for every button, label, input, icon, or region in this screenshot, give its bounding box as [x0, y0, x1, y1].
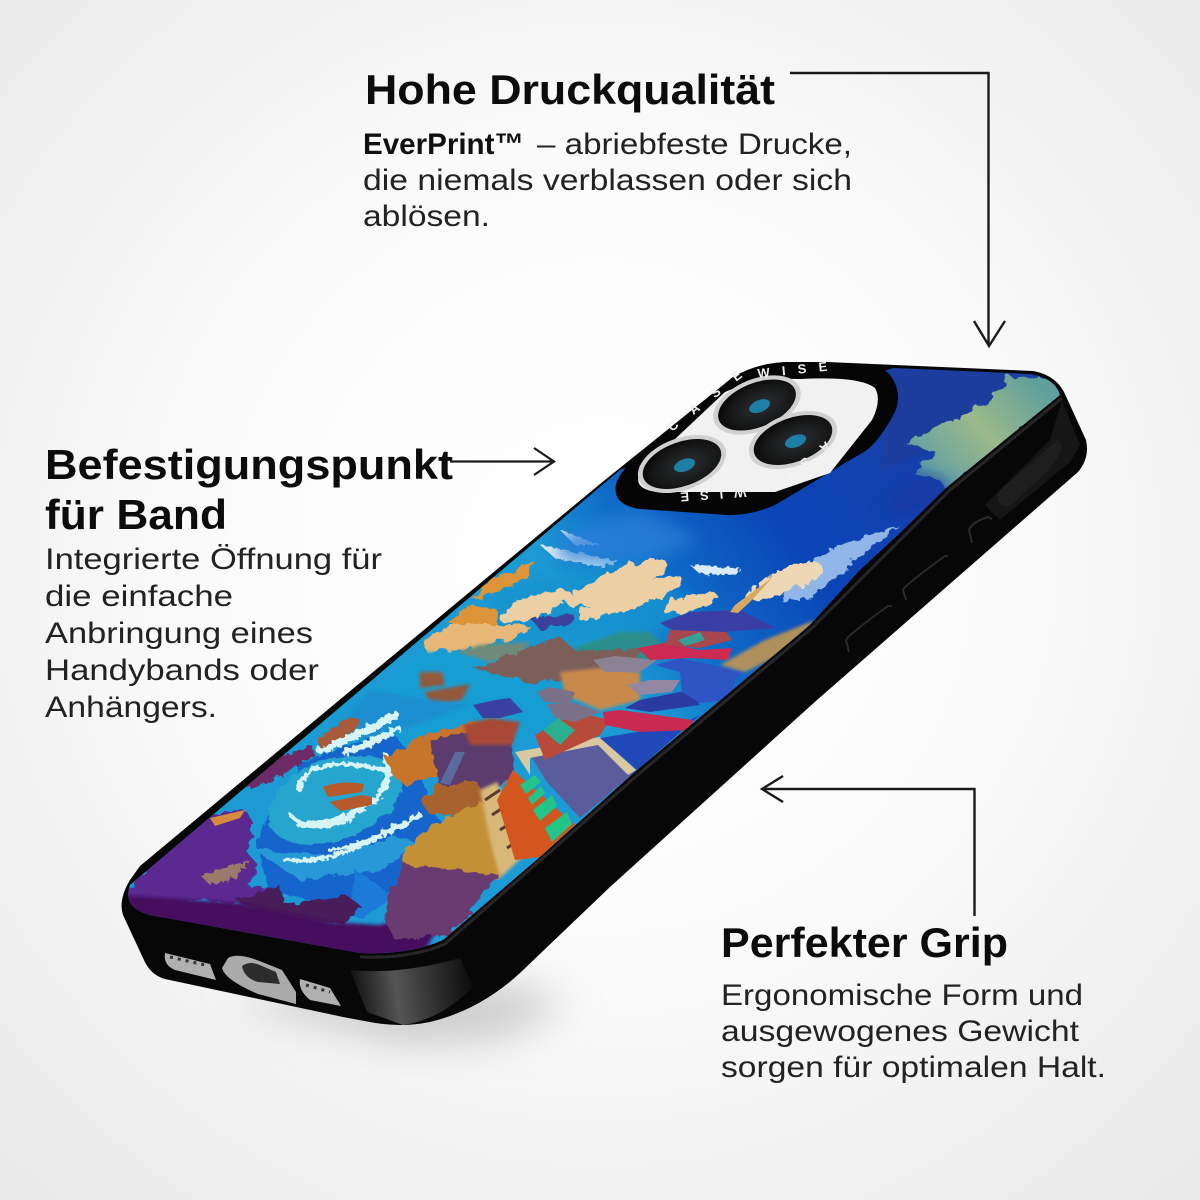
purple cliff [385, 865, 500, 940]
purple foreground rocks [128, 809, 270, 906]
description: Ergonomische Form und [721, 979, 1083, 1012]
green windows [520, 775, 572, 842]
camera island [616, 359, 898, 515]
bright blue water inlet [350, 870, 390, 920]
temple wall orange [497, 770, 575, 860]
description: – abriebfeste Drucke, [537, 128, 852, 161]
description [721, 979, 1106, 1084]
water turquoise core [268, 755, 403, 846]
green windows mid [543, 718, 575, 745]
walkway balustrade [480, 782, 530, 878]
sea rocks [420, 672, 470, 705]
ring lettering: W I S E [757, 359, 828, 381]
golden rocks [387, 722, 478, 785]
side switch [997, 440, 1061, 506]
description [363, 128, 852, 233]
description: Anbringung eines [45, 617, 313, 650]
ring lettering [665, 359, 853, 505]
rocks behind stairs [430, 732, 514, 794]
small left pagoda roof [473, 698, 523, 718]
description: die niemals verblassen oder sich [363, 164, 852, 197]
arrow: strap attachment [450, 448, 554, 475]
description: Handybands oder [45, 654, 319, 687]
description: Integrierte Öffnung für [45, 543, 382, 576]
roof cream edge [515, 737, 636, 775]
upper pagoda body [665, 630, 732, 648]
big tiled roof [530, 740, 635, 818]
camera ring [616, 362, 898, 515]
arrow: print quality [790, 73, 1005, 346]
orange rock top [210, 810, 245, 826]
blue roof right [655, 658, 745, 703]
vortex rocks [323, 783, 372, 811]
cream clouds [500, 558, 718, 624]
arrow: grip [762, 776, 974, 916]
teal windows [678, 632, 705, 646]
charging port [222, 956, 296, 1004]
lens left [630, 424, 734, 504]
golden temple lower floor [535, 712, 610, 760]
callout: print quality [363, 66, 852, 233]
upper pagoda roof [660, 610, 777, 632]
description: ablösen. [363, 200, 490, 233]
glossy bottom corner [350, 958, 473, 1025]
rail posts [485, 790, 522, 848]
gold tint on rock [200, 860, 250, 885]
case silhouette [122, 362, 1087, 1025]
green cloud [905, 376, 1062, 492]
case artwork [128, 368, 1060, 954]
description [45, 543, 382, 724]
teal mountain [573, 632, 668, 662]
right hillside [720, 620, 815, 672]
mid dark windows [625, 690, 700, 712]
stairs [440, 752, 465, 785]
sea [313, 650, 580, 744]
ring lettering: C A S E [665, 367, 745, 434]
lower rocks [235, 885, 360, 925]
balcony upper [637, 643, 732, 660]
water vortex [256, 736, 442, 900]
heading: für Band [45, 491, 227, 538]
lens right [741, 400, 845, 480]
phone case [122, 362, 1087, 1025]
rim highlight [360, 398, 1062, 957]
dark sky streaks [880, 368, 1012, 470]
heading: Hohe Druckqualität [365, 66, 775, 113]
heading [45, 441, 453, 538]
orange clouds [447, 560, 533, 628]
spire [730, 577, 773, 613]
dark pocket below cloud [902, 465, 954, 520]
heading: Perfekter Grip [721, 919, 1008, 966]
ring lettering: C A S E [777, 423, 853, 487]
sky [128, 368, 1060, 954]
description: Anhängers. [45, 691, 217, 724]
side buttons [846, 517, 992, 652]
white sky wisps [540, 530, 740, 575]
upper-left foam sea [338, 692, 465, 739]
phone shadow [230, 985, 570, 1045]
grey roof upper [593, 656, 657, 672]
red balcony [603, 710, 693, 732]
purple cloud base [530, 613, 573, 630]
grey roof mid [627, 680, 680, 695]
mid gold floors [560, 668, 640, 710]
case side shading [985, 400, 1080, 520]
cream cloud right [745, 560, 824, 602]
turquoise low sky [582, 559, 698, 632]
right cloud bank [780, 525, 900, 600]
gold cliff [405, 800, 510, 880]
heading: Befestigungspunkt [45, 441, 453, 488]
water lower band [255, 835, 420, 880]
callout: strap attachment [45, 441, 453, 724]
orange rock right [420, 782, 485, 815]
low cloud horizon [425, 625, 530, 652]
grey roof lower-left [537, 687, 600, 722]
lens top [705, 364, 809, 446]
far headland [457, 642, 530, 662]
blue lower temple [600, 715, 700, 770]
description: die einfache [45, 580, 233, 613]
foam [285, 715, 420, 861]
headland [473, 637, 640, 682]
callout: grip [721, 919, 1106, 1084]
bottom purple band [128, 894, 436, 954]
bottom speaker right [300, 979, 341, 1006]
description: EverPrint™ [363, 128, 524, 161]
top-left rocks [318, 717, 360, 748]
description: ausgewogenes Gewicht [721, 1015, 1080, 1048]
ring lettering: W I S E [680, 485, 747, 505]
bright sky patches [560, 510, 700, 565]
description: sorgen für optimalen Halt. [721, 1051, 1106, 1084]
small left pagoda base [463, 718, 520, 745]
bottom speaker left [165, 953, 216, 980]
camera plate [638, 378, 878, 492]
